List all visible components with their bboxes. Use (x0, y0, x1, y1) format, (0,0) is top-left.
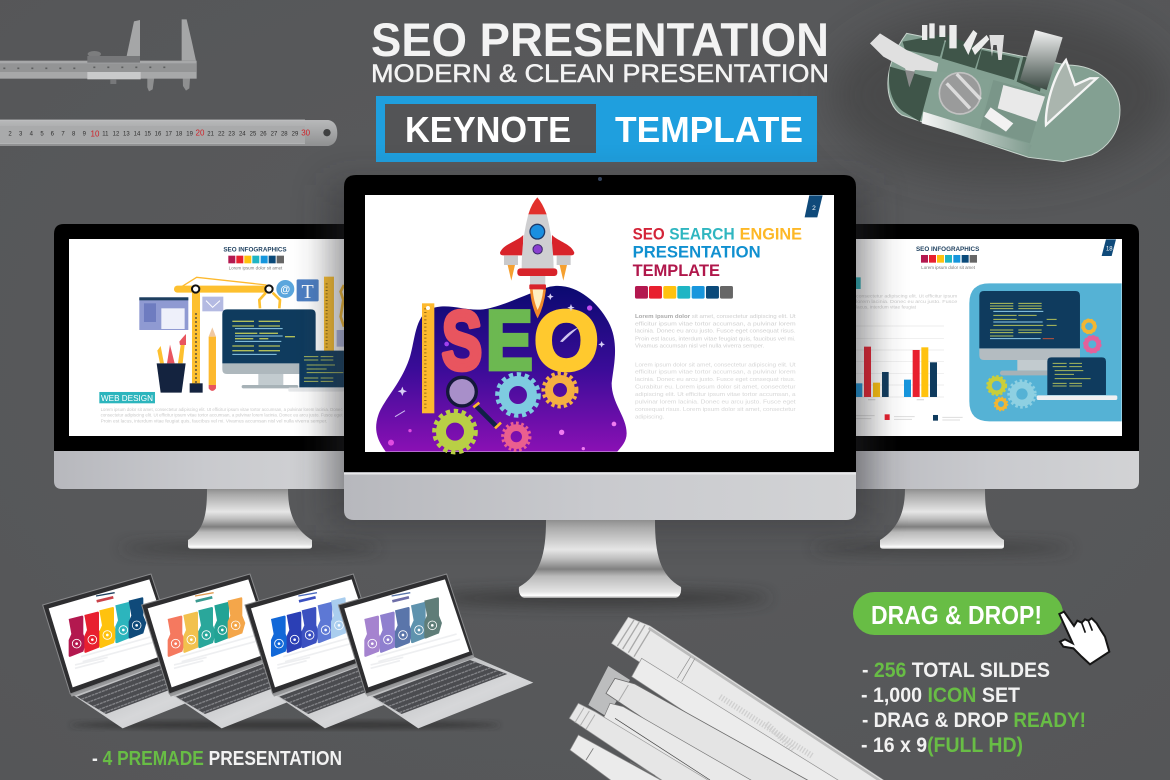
icon: steel ruler: 12 (113, 131, 120, 137)
bar chart (856, 326, 944, 400)
icon: steel ruler: 10 (91, 129, 100, 138)
page tag: 2 (805, 195, 823, 217)
icon: steel ruler: 3 (19, 131, 23, 137)
text: paragraph two: lacinia. Donec eu arcu justo. Fusce eget consequat risus. (635, 377, 796, 383)
icon: steel ruler: 18 (176, 131, 183, 137)
text: web design body: Lorem ipsum dolor sit amet, consectetur adipiscing elit. Ut efficitur ipsum vitae tortor accumsan, a pulvinar lorem lacinia. Donec (101, 407, 343, 412)
icon: at sign (276, 280, 294, 298)
icon: steel ruler: 14 (134, 131, 141, 137)
text: web design body: Proin est lacus, interdum vitae feugiat quis, faucibus vel mi. Vivamus accumsan nisl vel nulla viverra semper. (101, 419, 327, 424)
icon: steel ruler: 23 (228, 131, 236, 137)
page tag: 2: 2 (812, 205, 816, 212)
text: feature list: - 1,000 ICON SET (861, 684, 1020, 707)
heading: SEO search engine: ENGINE (740, 225, 802, 243)
heading: SEO search engine: PRESENTATION (633, 244, 761, 262)
icon: envelope (202, 297, 223, 311)
right slide contents: SEO INFOGRAPHICS (916, 246, 980, 253)
text: paragraph two: pulvinar lorem lacinia. Donec eu arcu justo. Fusce eget (635, 399, 796, 405)
text: web design body (101, 407, 344, 424)
illustration: SEO space blob (376, 286, 627, 452)
icon: steel ruler: 16 (155, 131, 162, 137)
left slide contents: Lorem ipsum dolor sit amet (229, 266, 283, 271)
icon: pencil pot (157, 334, 186, 393)
letters: SEO (442, 294, 598, 387)
label: web design: WEB DESIGN (101, 393, 153, 403)
icon: desktop computer (222, 309, 316, 388)
icon: magnifier (448, 377, 501, 428)
icon: steel ruler: 27 (271, 131, 278, 137)
icon: steel ruler: 28 (281, 131, 288, 137)
letters: SEO: S (442, 294, 482, 387)
icon: blueprint rolls (569, 617, 888, 780)
icon: vernier caliper (0, 19, 197, 91)
laptop: purple palette (338, 574, 533, 728)
text: web design body: consectetur adipiscing elit. Ut efficitur ipsum vitae tortor accumsan, a pulvinar lorem lacinia. Donec eu arcu justo. Fusce eget (101, 413, 344, 418)
banner: keynote template: KEYNOTE (405, 109, 571, 150)
icon: steel ruler: 26 (260, 131, 267, 137)
panel: blue illustration (969, 283, 1122, 421)
icon: steel ruler: 11 (102, 131, 109, 137)
icon: steel ruler: 25 (250, 131, 257, 137)
heading: SEO search engine: TEMPLATE (633, 262, 720, 280)
text: paragraph two: adipiscing. (635, 415, 665, 421)
icon: steel ruler: 6 (51, 131, 55, 137)
ruler (422, 303, 434, 413)
title: MODERN & CLEAN PRESENTATION (371, 60, 829, 88)
right slide contents (856, 239, 1122, 421)
text: paragraph two: consequat risus. Lorem ipsum dolor sit amet, consectetur (635, 407, 796, 413)
text: paragraph one: efficitur ipsum vitae tortor accumsan, a pulvinar lorem (635, 321, 796, 327)
text: paragraph two: efficitur ipsum vitae tortor accumsan, a pulvinar lorem (635, 370, 796, 376)
icon: steel ruler (0, 120, 337, 146)
title: SEO PRESENTATION (371, 13, 829, 66)
teal tag (856, 277, 861, 289)
icon: hand cursor (1059, 612, 1109, 664)
button: drag and drop (853, 592, 1063, 635)
monitor: center (330, 175, 870, 606)
text: feature list: - 256 TOTAL SILDES (862, 659, 1050, 682)
text: body (856, 293, 958, 310)
button: drag and drop: DRAG & DROP! (871, 600, 1042, 630)
icon: steel ruler: 4 (30, 131, 34, 137)
icon: steel ruler: 7 (61, 131, 65, 137)
icon: letter T (297, 279, 319, 303)
icon: steel ruler: 15 (144, 131, 152, 137)
monitor: left (54, 224, 380, 554)
icon: steel ruler: 19 (186, 131, 194, 137)
icon: steel ruler: 22 (218, 131, 225, 137)
laptop shadow (70, 721, 500, 729)
icon: browser window (139, 297, 188, 330)
letters: SEO: O (534, 294, 598, 387)
text: paragraph one: Lorem ipsum dolor sit amet, consectetur adipiscing elit. Ut (635, 314, 796, 320)
heading: SEO search engine (633, 225, 802, 280)
icon: steel ruler: 13 (123, 131, 130, 137)
icon: desk organizer (870, 23, 1120, 162)
icon: laptop (288, 351, 344, 392)
text: paragraph one: Proin est lacus, interdum vitae feugiat quis, faucibus vel mi. (635, 336, 796, 342)
icon: laptop (1037, 357, 1117, 400)
text: 4 premade presentation: - 4 PREMADE PRESENTATION (92, 748, 342, 770)
title (371, 13, 829, 88)
banner: keynote template: TEMPLATE (615, 109, 803, 150)
icon: steel ruler: 8 (72, 131, 76, 137)
laptop: red palette (43, 574, 238, 728)
icon: letter T: T (302, 281, 314, 303)
icon: steel ruler: 17 (165, 131, 173, 137)
icon: ruler (324, 277, 344, 352)
text: paragraph two: adipiscing elit. Ut efficitur ipsum vitae tortor accumsan, a (635, 392, 797, 398)
center slide contents (376, 195, 823, 452)
icon: steel ruler: 9 (83, 131, 87, 137)
icon: steel ruler: 24 (239, 131, 246, 137)
text: feature list: - DRAG & DROP READY! (862, 709, 1086, 732)
heading: SEO search engine: SEO (633, 225, 665, 243)
icon: steel ruler: 21 (207, 131, 215, 137)
heading: SEO search engine: SEARCH (669, 225, 735, 243)
gears (987, 320, 1101, 410)
text: body: lorem lacinia. Donec eu arcu justo. Fusce (856, 299, 958, 304)
chart legend (856, 414, 963, 421)
gears (434, 373, 577, 452)
text: paragraph two (635, 362, 797, 421)
icon: crane (174, 277, 280, 393)
text: feature list (861, 659, 1086, 757)
icon: steel ruler: 20 (196, 129, 205, 138)
laptop: blue palette (245, 574, 440, 728)
icon: steel ruler: 29 (292, 131, 299, 137)
left slide contents: SEO INFOGRAPHICS (223, 247, 287, 254)
icon: pencil (209, 327, 216, 391)
icon: desktop computer (979, 291, 1080, 375)
icon: at sign: @ (280, 284, 290, 295)
stars and sparks (388, 293, 616, 450)
page tag: 18 (1102, 239, 1116, 256)
icon: steel ruler: 2 (8, 131, 12, 137)
text: body: consectetur adipiscing elit. Ut efficitur ipsum (856, 293, 958, 298)
page tag: 18: 18 (1106, 247, 1113, 253)
text: paragraph one: lacinia. Donec eu arcu justo. Fusce eget consequat risus. (635, 329, 796, 335)
text: paragraph one (635, 314, 796, 350)
icon: steel ruler: 30 (301, 128, 311, 137)
color swatches (635, 286, 733, 299)
laptop: warm palette (142, 574, 337, 728)
banner: keynote template (376, 96, 817, 162)
text: feature list: - 16 x 9(FULL HD) (861, 734, 1023, 757)
text: body: lacus, interdum vitae feugiat (856, 305, 917, 310)
right slide contents: Lorem ipsum dolor sit amet (921, 265, 976, 270)
icon: rocket (500, 197, 574, 318)
text: paragraph two: Curabitur eu. Lorem ipsum dolor sit amet, consectetur (635, 385, 796, 391)
left slide contents (99, 247, 344, 424)
letters: SEO: E (486, 294, 533, 387)
monitor: right (812, 224, 1139, 554)
text: paragraph one: Vivamus accumsan nisl vel nulla viverra semper. (635, 344, 765, 350)
icon: steel ruler: 5 (40, 131, 44, 137)
text: paragraph two: Lorem ipsum dolor sit amet, consectetur adipiscing elit. Ut (635, 362, 796, 368)
